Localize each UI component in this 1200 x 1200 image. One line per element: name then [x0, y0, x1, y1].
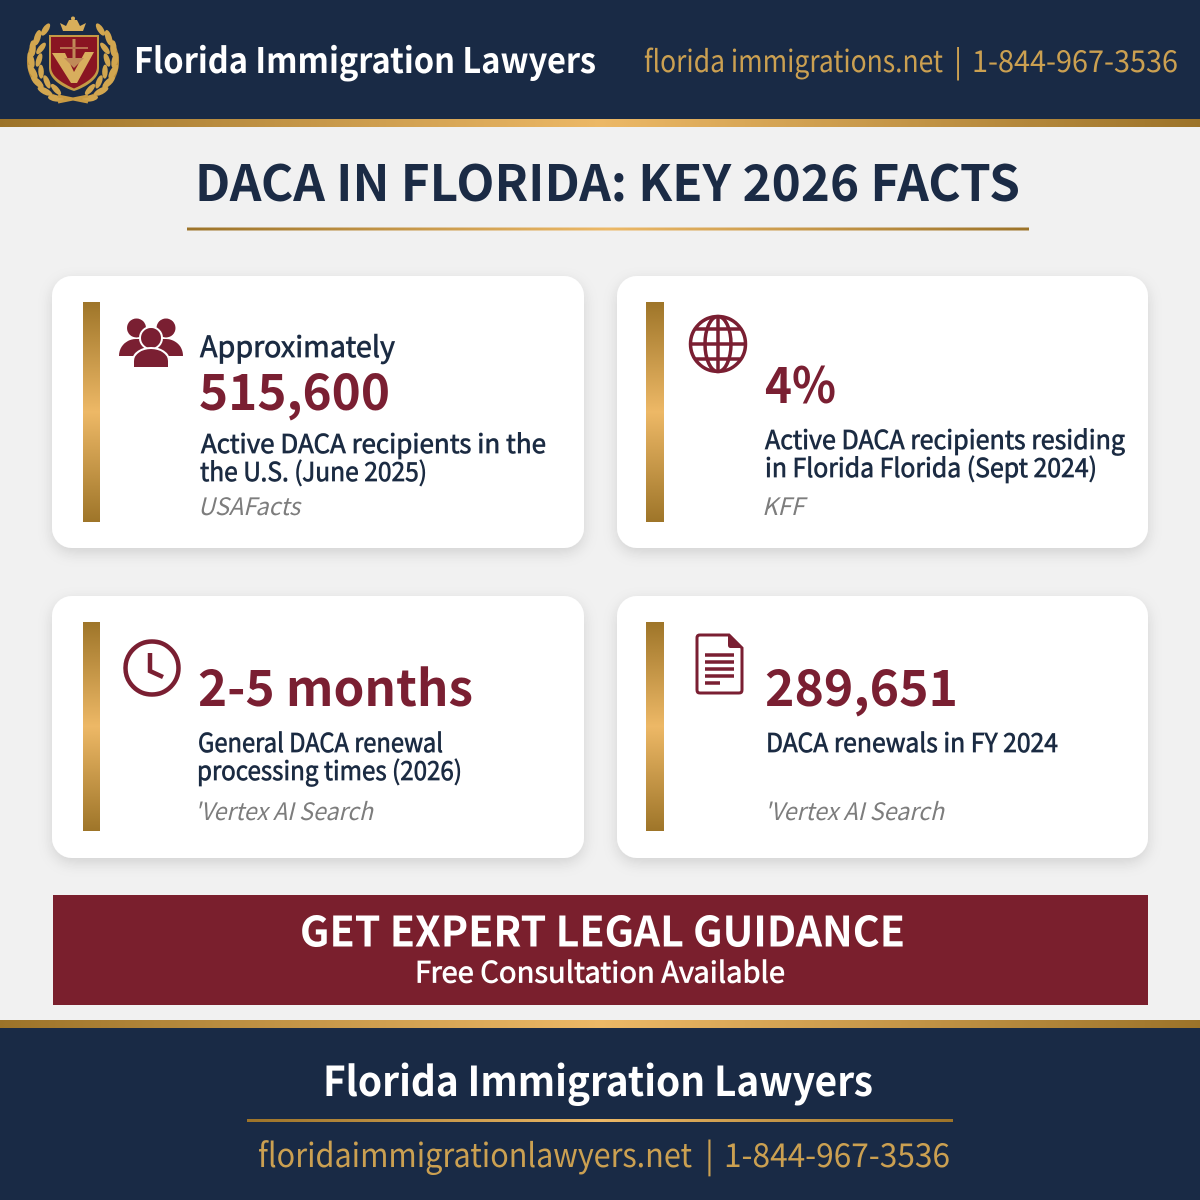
panel: active recipients: [52, 276, 584, 548]
firm name: Florida Immigration Lawyers: [134, 33, 596, 84]
icon: people: [119, 318, 183, 368]
icon: document: [697, 635, 742, 693]
contact line: |: [954, 37, 962, 81]
contact line: [644, 37, 1178, 81]
label: Approximately: [200, 324, 395, 366]
footer contact line: |: [705, 1129, 714, 1177]
ribbon: [58, 96, 88, 102]
footer contact line: floridaimmigrationlawyers.net: [258, 1129, 692, 1177]
footer firm name: Florida Immigration Lawyers: [323, 1048, 873, 1108]
description: DACA renewals in FY 2024: [766, 723, 1058, 760]
icon: globe: [690, 316, 746, 372]
banner subheading: Free Consultation Available: [415, 950, 785, 992]
source: KFF: [762, 487, 808, 522]
panel: Florida share: [617, 276, 1148, 548]
wreath right: [76, 22, 120, 103]
figure: 515,600: [199, 353, 390, 425]
figure: 4%: [765, 346, 836, 418]
source: 'Vertex AI Search: [764, 792, 945, 827]
wreath left: [26, 22, 70, 103]
footer contact line: [258, 1129, 950, 1177]
crown: [60, 20, 86, 31]
source: USAFacts: [198, 487, 302, 522]
logo: crest with wreath, shield and crown: [26, 16, 120, 103]
shield: [49, 35, 99, 91]
description: [765, 420, 1125, 485]
panel: renewals: [617, 596, 1148, 858]
description: the U.S. (June 2025): [200, 452, 427, 489]
title: DACA IN FLORIDA: KEY 2026 FACTS: [195, 144, 1020, 216]
footer: [0, 1020, 1200, 1200]
description: Active DACA recipients residing: [765, 420, 1125, 457]
banner heading: GET EXPERT LEGAL GUIDANCE: [300, 898, 905, 960]
call to action banner: [53, 895, 1148, 1005]
figure: 2-5 months: [198, 649, 473, 721]
icon: clock: [126, 642, 178, 694]
contact line: florida immigrations.net: [644, 37, 943, 81]
source: 'Vertex AI Search: [194, 792, 374, 827]
figure: 289,651: [765, 649, 958, 721]
panel: processing times: [52, 596, 584, 858]
description: [200, 424, 546, 489]
description: in Florida Florida (Sept 2024): [765, 448, 1097, 485]
description: [197, 723, 462, 788]
footer contact line: 1-844-967-3536: [724, 1129, 950, 1177]
header bar: [0, 0, 1200, 127]
contact line: 1-844-967-3536: [972, 37, 1178, 81]
description: General DACA renewal: [198, 723, 443, 760]
description: Active DACA recipients in the: [201, 424, 546, 461]
description: processing times (2026): [197, 751, 462, 788]
